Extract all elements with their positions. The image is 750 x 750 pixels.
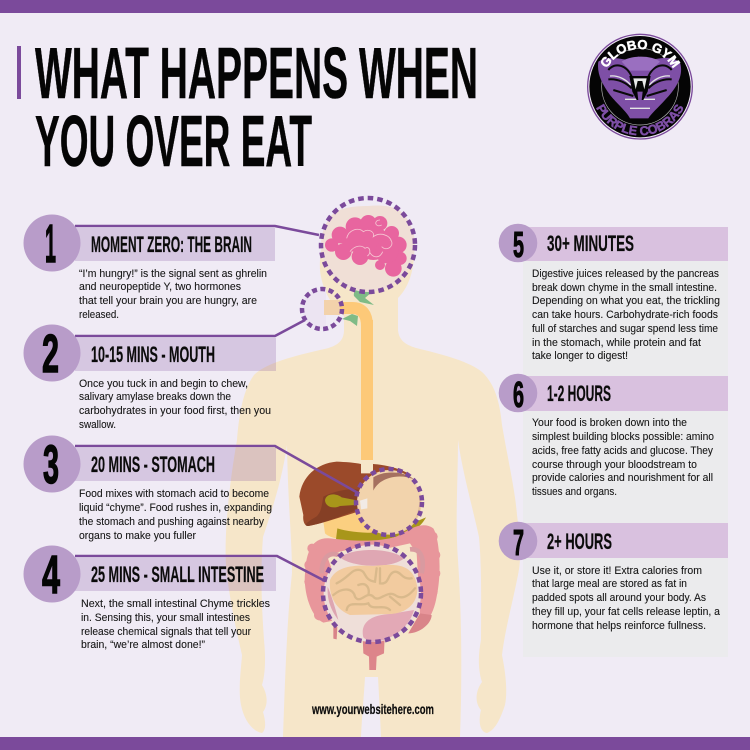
step 1 band (75, 228, 275, 261)
step 2: swallow. (79, 419, 116, 431)
step 1: that tell your brain you are hungry, are (79, 295, 257, 307)
step 6: 1-2 HOURS (547, 381, 611, 406)
step 7: 7 (513, 522, 524, 563)
logo: Globo Gym Purple Cobras (587, 34, 693, 140)
step 2: salivary amylase breaks down the (79, 391, 231, 403)
icon: brain (325, 215, 407, 277)
step 4: 4 (42, 545, 60, 605)
small intestine (324, 545, 421, 642)
step 1: released. (79, 309, 119, 321)
title (35, 34, 478, 182)
panel: step 5 text background (523, 261, 728, 376)
mouth callout (302, 289, 342, 329)
step 4: brain, “we’re almost done!” (81, 639, 205, 651)
step 3: 20 MINS - STOMACH (91, 452, 215, 477)
connector: stomach (75, 446, 358, 493)
step 4: Next, the small intestinal Chyme trickles (81, 598, 270, 610)
logo: Globo Gym Purple Cobras: GLOBO GYM (601, 40, 680, 68)
step 6 (499, 374, 728, 498)
step 5: full of starches and sugar spend less time (532, 323, 718, 335)
connector: small intestine (75, 556, 325, 581)
step 4: in. Sensing this, your small intestines (81, 612, 250, 624)
bottom bar (0, 737, 750, 750)
logo: Globo Gym Purple Cobras: PURPLE COBRAS (596, 104, 684, 136)
step 1 (24, 214, 267, 321)
panel: step 6 text background (523, 411, 728, 523)
step 4: release chemical signals that tell your (81, 626, 251, 638)
rectum (363, 637, 385, 670)
step 3: 3 (43, 435, 59, 495)
step 4 band (75, 558, 276, 591)
body silhouette (226, 206, 520, 737)
olive organ (336, 517, 426, 542)
step 7 (499, 522, 728, 632)
step 6: Your food is broken down into the (532, 417, 687, 429)
step 6: tissues and organs. (532, 486, 617, 498)
step 7: that large meal are stored as fat in (532, 578, 687, 590)
step 5: break down chyme in the small intestine. (532, 282, 717, 294)
step 6: provide calories and nourishment for all (532, 472, 713, 484)
small intestine callout circle (323, 544, 421, 642)
step 5: in the stomach, while protein and fat (532, 337, 701, 349)
step 2 (24, 324, 271, 431)
website URL: www.yourwebsitehere.com (311, 701, 434, 717)
step 6: simplest building blocks possible: amino (532, 431, 714, 443)
step 5: Digestive juices released by the pancreas (532, 268, 719, 280)
top bar (0, 0, 750, 13)
title accent (17, 46, 21, 99)
step 7: they fill up, your fat cells release leptin, a (532, 606, 720, 618)
step 2 band (75, 338, 276, 371)
step 6: course through your bloodstream to (532, 459, 697, 471)
step 2: 10-15 MINS - MOUTH (91, 342, 215, 367)
step 3: the stomach and pushing against nearby (79, 516, 265, 528)
step 7: 2+ HOURS (547, 529, 612, 554)
step 3: organs to make you fuller (79, 530, 196, 542)
brain callout (321, 198, 415, 292)
step 5: Depending on what you eat, the trickling (532, 295, 720, 307)
esophagus upper (340, 308, 367, 345)
step 7: Use it, or store it! Extra calories from (532, 565, 702, 577)
step 4: 25 MINS - SMALL INTESTINE (91, 562, 264, 587)
step 7: hormone that helps reinforce fullness. (532, 620, 706, 632)
liver (299, 462, 413, 526)
panel: step 7 text background (523, 558, 728, 657)
step 5 (499, 224, 728, 362)
step 2: 2 (42, 324, 59, 384)
step 1: and neuropeptide Y, two hormones (79, 281, 241, 293)
step 1: 1 (45, 214, 56, 274)
connector: brain (75, 226, 319, 235)
connector: mouth (75, 320, 305, 336)
step 3: Food mixes with stomach acid to become (79, 488, 269, 500)
step 3 (24, 435, 272, 542)
step 3 band (75, 448, 276, 481)
step 5: 5 (513, 224, 524, 265)
title: YOU OVER EAT (35, 102, 312, 182)
digestive organs (299, 320, 440, 670)
step 3: liquid “chyme”. Food rushes in, expanding (79, 502, 272, 514)
large intestine (304, 525, 440, 639)
step 1: MOMENT ZERO: THE BRAIN (91, 232, 252, 257)
step 6: acids, free fatty acids and glucose. They (532, 445, 714, 457)
step 5: 30+ MINUTES (547, 231, 634, 256)
stomach callout circle (356, 469, 422, 535)
step 7: padded spots all around your body. As (532, 592, 706, 604)
step 5: take longer to digest! (532, 350, 628, 362)
step 2: carbohydrates in your food first, then you (79, 405, 271, 417)
step 1: “I’m hungry!” is the signal sent as ghrelin (79, 268, 267, 280)
step 2: Once you tuck in and begin to chew, (79, 378, 248, 390)
neck glands (342, 288, 374, 326)
esophagus and pancreas (323, 320, 390, 540)
step 5: can take hours. Carbohydrate-rich foods (532, 309, 718, 321)
step 6: 6 (513, 374, 524, 415)
step 4 (24, 545, 270, 651)
stomach (357, 470, 422, 535)
